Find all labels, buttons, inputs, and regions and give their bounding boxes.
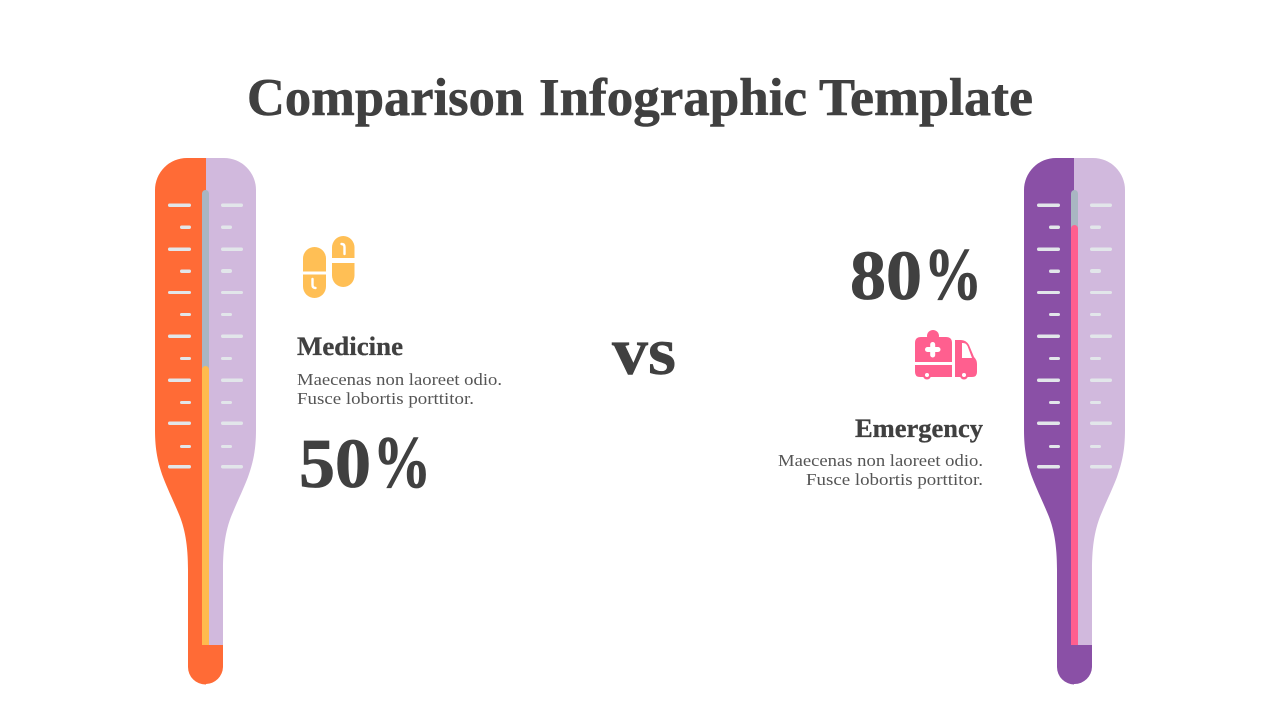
vs label: vs bbox=[612, 313, 676, 389]
tube track bbox=[202, 190, 209, 645]
text block: emergency description: Fusce lobortis porttitor. bbox=[806, 470, 983, 489]
icon: medicine capsules bbox=[303, 236, 354, 298]
base below lavender bbox=[206, 645, 223, 684]
text block: medicine description bbox=[297, 370, 502, 408]
stat: 80%: % bbox=[924, 234, 982, 316]
title bbox=[247, 69, 1033, 127]
title: Comparison bbox=[247, 69, 524, 127]
thermometer body: purple half bbox=[1024, 158, 1074, 684]
thermometer body: lavender half bbox=[1074, 158, 1125, 645]
stat: 80%: 80 bbox=[850, 238, 922, 315]
text block: medicine description: Maecenas non laoreet odio. bbox=[297, 370, 502, 389]
tube fill 80% bbox=[1071, 225, 1078, 645]
heading: emergency: Emergency bbox=[855, 414, 983, 443]
thermometer body: orange half bbox=[155, 158, 206, 684]
stat: 50%: % bbox=[373, 422, 431, 504]
scale ticks bbox=[1037, 204, 1112, 468]
title: Template bbox=[819, 69, 1033, 127]
thermometer: emergency bbox=[1024, 158, 1125, 684]
tube track bbox=[1071, 190, 1078, 645]
title: Infographic bbox=[539, 69, 807, 127]
text block: emergency description: Maecenas non laoreet odio. bbox=[778, 451, 983, 470]
base below lavender bbox=[1074, 645, 1092, 684]
scale ticks bbox=[168, 204, 243, 468]
text block: emergency description bbox=[778, 451, 983, 489]
stat: 50% bbox=[299, 422, 431, 504]
heading: medicine: Medicine bbox=[297, 332, 403, 361]
thermometer body: lavender half bbox=[206, 158, 256, 645]
icon: ambulance bbox=[915, 330, 977, 380]
stat: 50%: 50 bbox=[299, 426, 371, 503]
text block: medicine description: Fusce lobortis porttitor. bbox=[297, 389, 474, 408]
thermometer: medicine bbox=[155, 158, 256, 684]
stat: 80% bbox=[850, 234, 982, 316]
tube fill 50% bbox=[202, 366, 209, 645]
